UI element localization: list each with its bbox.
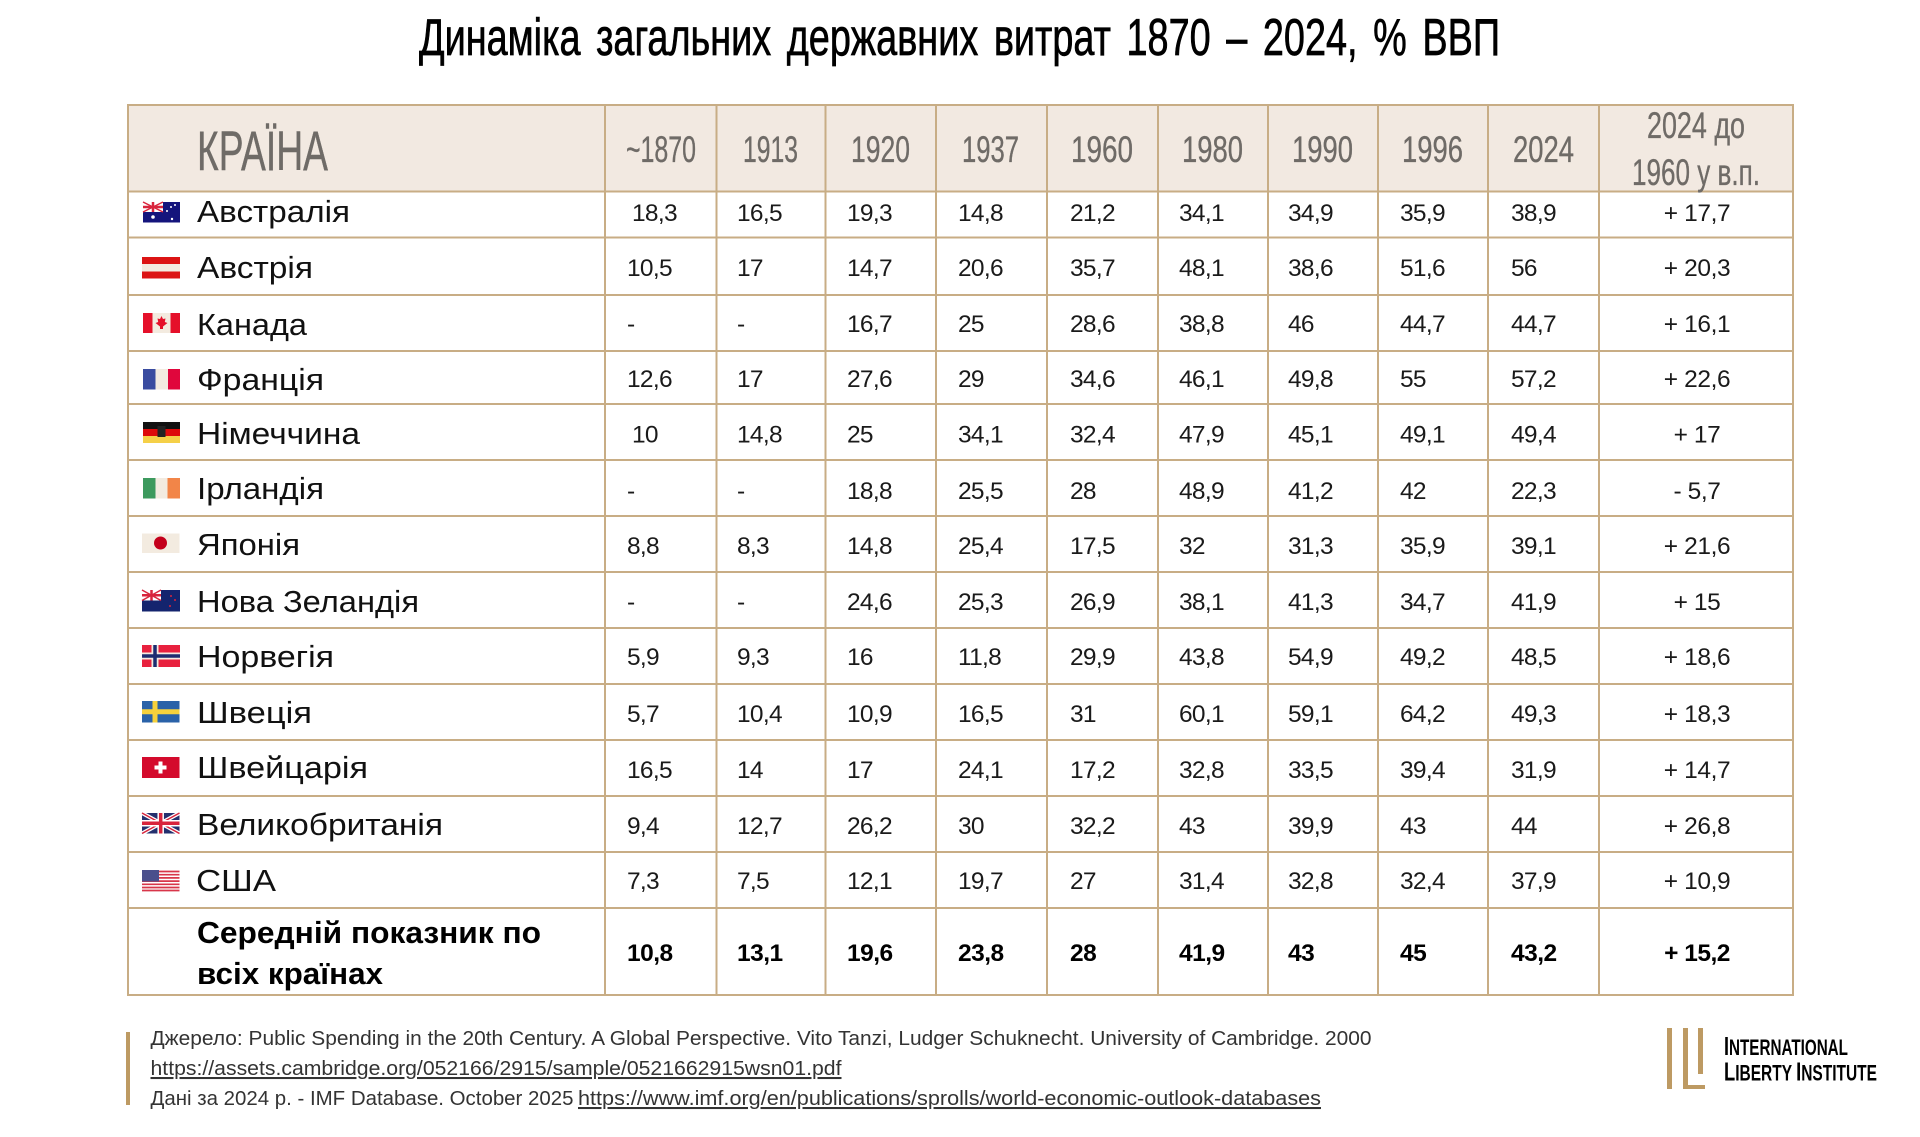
values — [627, 311, 1730, 338]
average values: 13,1 — [737, 940, 783, 967]
icon: flag of USA — [142, 870, 180, 891]
icon: flag of Germany — [143, 422, 180, 443]
row: Канада — [143, 307, 1730, 342]
values: 25,3 — [958, 589, 1003, 616]
logo: International Liberty Institute — [1667, 1028, 1877, 1089]
values: 56 — [1511, 255, 1537, 282]
values: 31 — [1070, 701, 1096, 728]
row: Франція — [143, 362, 1730, 397]
table grid — [128, 105, 1793, 995]
row: Австрія — [142, 250, 1730, 285]
header: 2024 vs 1960 — [1632, 105, 1760, 193]
values: 16,7 — [847, 311, 892, 338]
icon: flag of New Zealand — [142, 590, 180, 612]
values: 25 — [958, 311, 984, 338]
values: 35,9 — [1400, 200, 1445, 227]
values: 16,5 — [737, 200, 782, 227]
country name: Німеччина — [197, 416, 361, 451]
values: 19,3 — [847, 200, 892, 227]
values: 17 — [737, 366, 763, 393]
values: 10 — [632, 422, 658, 448]
values: 25,4 — [958, 533, 1003, 560]
values — [627, 255, 1730, 282]
title: Динаміка загальних державних витрат 1870 – 2024, % ВВП — [419, 9, 1500, 67]
values: 25,5 — [958, 478, 1003, 505]
values: 37,9 — [1511, 868, 1556, 895]
values: 18,8 — [847, 478, 892, 505]
values: 32,4 — [1070, 422, 1115, 448]
header: years: 1960 — [1071, 129, 1133, 170]
values: 33,5 — [1288, 757, 1333, 784]
values: 48,5 — [1511, 644, 1556, 671]
values: 43 — [1179, 813, 1205, 840]
values: 21,2 — [1070, 200, 1115, 227]
values: 22,3 — [1511, 478, 1556, 505]
country name: Австрія — [197, 250, 313, 285]
header row — [197, 105, 1760, 193]
values: 28 — [1070, 478, 1096, 505]
icon: flag of Australia — [143, 202, 180, 222]
country name: Канада — [197, 307, 308, 342]
header: 2024 vs 1960: 2024 до — [1647, 105, 1745, 146]
values: 41,2 — [1288, 478, 1333, 505]
values: 17,5 — [1070, 533, 1115, 560]
values: 44,7 — [1511, 311, 1556, 338]
header: 2024 vs 1960: 1960 у в.п. — [1632, 152, 1760, 193]
values: 14,8 — [847, 533, 892, 560]
values — [627, 868, 1730, 895]
values: + 14,7 — [1664, 757, 1730, 784]
values: 32,4 — [1400, 868, 1445, 895]
values: 38,6 — [1288, 255, 1333, 282]
values: 12,1 — [847, 868, 892, 895]
source notes — [150, 1027, 1372, 1110]
average values: 41,9 — [1179, 940, 1225, 967]
values: 48,9 — [1179, 478, 1224, 505]
average values: + 15,2 — [1664, 940, 1730, 967]
values: 29,9 — [1070, 644, 1115, 671]
values: 47,9 — [1179, 422, 1224, 448]
values: 59,1 — [1288, 701, 1333, 728]
values: 48,1 — [1179, 255, 1224, 282]
values — [632, 422, 1720, 448]
values: 46 — [1288, 311, 1314, 338]
row: Великобританія — [142, 807, 1730, 842]
values: 44 — [1511, 813, 1537, 840]
logo wordmark: LIBERTY INSTITUTE — [1724, 1056, 1877, 1086]
average values: 43,2 — [1511, 940, 1557, 967]
values: 32 — [1179, 533, 1205, 560]
values: 31,3 — [1288, 533, 1333, 560]
values — [627, 478, 1721, 505]
values: + 17,7 — [1664, 200, 1730, 227]
values: + 18,6 — [1664, 644, 1730, 671]
values: 38,1 — [1179, 589, 1224, 616]
header: years: ~1870 — [626, 129, 696, 170]
row: Швейцарія — [142, 750, 1730, 785]
values: 38,9 — [1511, 200, 1556, 227]
values: - — [627, 311, 635, 338]
values: 51,6 — [1400, 255, 1445, 282]
average values: 28 — [1070, 940, 1096, 967]
values: 28,6 — [1070, 311, 1115, 338]
values: 44,7 — [1400, 311, 1445, 338]
icon: flag of Norway — [142, 645, 180, 667]
values: + 22,6 — [1664, 366, 1730, 393]
values: 9,3 — [737, 644, 769, 671]
values: + 26,8 — [1664, 813, 1730, 840]
values — [627, 757, 1730, 784]
values: 16 — [847, 644, 873, 671]
values: 43 — [1400, 813, 1426, 840]
average values — [627, 940, 1730, 967]
row: Австралія — [143, 194, 1730, 229]
values: 12,6 — [627, 366, 672, 393]
values: 39,1 — [1511, 533, 1556, 560]
values: 17 — [737, 255, 763, 282]
values: 19,7 — [958, 868, 1003, 895]
header: years: 1920 — [851, 129, 910, 170]
values: 34,6 — [1070, 366, 1115, 393]
values: 18,3 — [632, 200, 677, 227]
values: 5,9 — [627, 644, 659, 671]
source notes: Дані за 2024 р. - IMF Database. October 2025 — [150, 1087, 574, 1110]
values: 14,7 — [847, 255, 892, 282]
values: 34,1 — [958, 422, 1003, 448]
average label: всіх країнах — [197, 956, 384, 991]
values: - — [737, 589, 745, 616]
logo wordmark: INTERNATIONAL — [1724, 1031, 1848, 1061]
values: + 18,3 — [1664, 701, 1730, 728]
average values: 19,6 — [847, 940, 893, 967]
country name: Швеція — [197, 695, 312, 730]
icon: flag of Sweden — [142, 701, 180, 722]
header: years: 2024 — [1513, 129, 1574, 170]
country name: США — [196, 863, 276, 898]
header: years: 1937 — [962, 129, 1019, 170]
values: 41,3 — [1288, 589, 1333, 616]
values: - — [627, 589, 635, 616]
header: years — [626, 129, 1574, 170]
values: 17 — [847, 757, 873, 784]
average label: Середній показник по — [197, 915, 541, 950]
values: 25 — [847, 422, 873, 448]
header: years: 1913 — [743, 129, 798, 170]
values: 5,7 — [627, 701, 659, 728]
values: 14,8 — [737, 422, 782, 448]
source notes: Джерело: Public Spending in the 20th Century. A Global Perspective. Vito Tanzi, Ludger Schuknecht. University of Cambridge. 2000 — [150, 1027, 1372, 1050]
values: 43,8 — [1179, 644, 1224, 671]
values: 49,8 — [1288, 366, 1333, 393]
values: 55 — [1400, 366, 1426, 393]
icon: flag of United Kingdom — [142, 813, 180, 834]
values: 49,3 — [1511, 701, 1556, 728]
country name: Франція — [197, 362, 324, 397]
values: - — [737, 311, 745, 338]
values: 49,2 — [1400, 644, 1445, 671]
values: 8,8 — [627, 533, 659, 560]
logo wordmark — [1724, 1031, 1877, 1086]
values: 60,1 — [1179, 701, 1224, 728]
values: 14 — [737, 757, 763, 784]
country name: Норвегія — [197, 639, 334, 674]
icon: flag of Ireland — [143, 478, 180, 498]
values: 10,5 — [627, 255, 672, 282]
header: years: 1990 — [1292, 129, 1353, 170]
logo mark — [1667, 1028, 1705, 1089]
values: 31,4 — [1179, 868, 1224, 895]
values: 35,9 — [1400, 533, 1445, 560]
values: + 16,1 — [1664, 311, 1730, 338]
icon: flag of Austria — [142, 257, 180, 278]
values: 29 — [958, 366, 984, 393]
values — [627, 644, 1730, 671]
country name: Нова Зеландія — [197, 584, 419, 619]
values: 39,9 — [1288, 813, 1333, 840]
values: + 10,9 — [1664, 868, 1730, 895]
values: 32,8 — [1179, 757, 1224, 784]
country name: Великобританія — [197, 807, 443, 842]
values — [627, 701, 1730, 728]
values: 30 — [958, 813, 984, 840]
source notes: https://assets.cambridge.org/052166/2915/sample/0521662915wsn01.pdf — [150, 1057, 842, 1080]
row: Німеччина — [143, 416, 1720, 451]
row: Ірландія — [143, 471, 1721, 506]
values: 8,3 — [737, 533, 769, 560]
average values: 10,8 — [627, 940, 673, 967]
values — [627, 533, 1730, 560]
values: 11,8 — [958, 644, 1001, 671]
values: - — [737, 478, 745, 505]
icon: flag of Switzerland — [142, 757, 180, 778]
values: 32,2 — [1070, 813, 1115, 840]
values: - — [627, 478, 635, 505]
icon: flag of Canada — [143, 313, 180, 333]
average label — [197, 915, 541, 991]
values: 20,6 — [958, 255, 1003, 282]
values — [627, 813, 1730, 840]
values — [627, 589, 1720, 616]
row: Японія — [142, 527, 1730, 562]
country name: Швейцарія — [197, 750, 368, 785]
values: 35,7 — [1070, 255, 1115, 282]
values: 16,5 — [627, 757, 672, 784]
values: 31,9 — [1511, 757, 1556, 784]
table header background — [128, 105, 1793, 191]
values: 45,1 — [1288, 422, 1333, 448]
header: years: 1996 — [1402, 129, 1463, 170]
values: 46,1 — [1179, 366, 1224, 393]
row: Норвегія — [142, 639, 1730, 674]
values: 26,9 — [1070, 589, 1115, 616]
values: 16,5 — [958, 701, 1003, 728]
table — [128, 105, 1793, 995]
values: 26,2 — [847, 813, 892, 840]
values: 10,9 — [847, 701, 892, 728]
country name: Ірландія — [197, 471, 324, 506]
row: Нова Зеландія — [142, 584, 1720, 619]
average values: 43 — [1288, 940, 1314, 967]
values: 27,6 — [847, 366, 892, 393]
values: 27 — [1070, 868, 1096, 895]
country name: Австралія — [197, 194, 350, 229]
values: 17,2 — [1070, 757, 1115, 784]
row: average across countries — [197, 915, 1730, 991]
values: 32,8 — [1288, 868, 1333, 895]
values: 57,2 — [1511, 366, 1556, 393]
source accent bar — [126, 1032, 130, 1105]
values: 54,9 — [1288, 644, 1333, 671]
values: + 20,3 — [1664, 255, 1730, 282]
values: 41,9 — [1511, 589, 1556, 616]
values: 34,7 — [1400, 589, 1445, 616]
average values: 45 — [1400, 940, 1426, 967]
row: Швеція — [142, 695, 1730, 730]
values: + 15 — [1674, 589, 1720, 616]
values: 24,1 — [958, 757, 1003, 784]
row: США — [142, 863, 1730, 898]
values: 49,4 — [1511, 422, 1556, 448]
values: - 5,7 — [1673, 478, 1721, 505]
values: 38,8 — [1179, 311, 1224, 338]
average values: 23,8 — [958, 940, 1004, 967]
source notes: https://www.imf.org/en/publications/sprolls/world-economic-outlook-databases — [578, 1087, 1321, 1110]
values: 12,7 — [737, 813, 782, 840]
values: 64,2 — [1400, 701, 1445, 728]
header: years: 1980 — [1182, 129, 1243, 170]
values — [632, 200, 1730, 227]
values: 14,8 — [958, 200, 1003, 227]
values: + 17 — [1674, 422, 1720, 448]
values: 9,4 — [627, 813, 659, 840]
icon: flag of France — [143, 369, 180, 390]
icon: flag of Japan — [142, 534, 180, 553]
values: 49,1 — [1400, 422, 1445, 448]
values — [627, 366, 1730, 393]
country name: Японія — [197, 527, 300, 562]
values: 24,6 — [847, 589, 892, 616]
values: 34,1 — [1179, 200, 1224, 227]
values: 10,4 — [737, 701, 782, 728]
header: country: КРАЇНА — [197, 119, 328, 182]
values: 7,3 — [627, 868, 659, 895]
values: 7,5 — [737, 868, 769, 895]
values: 39,4 — [1400, 757, 1445, 784]
values: + 21,6 — [1664, 533, 1730, 560]
values: 42 — [1400, 478, 1426, 505]
values: 34,9 — [1288, 200, 1333, 227]
